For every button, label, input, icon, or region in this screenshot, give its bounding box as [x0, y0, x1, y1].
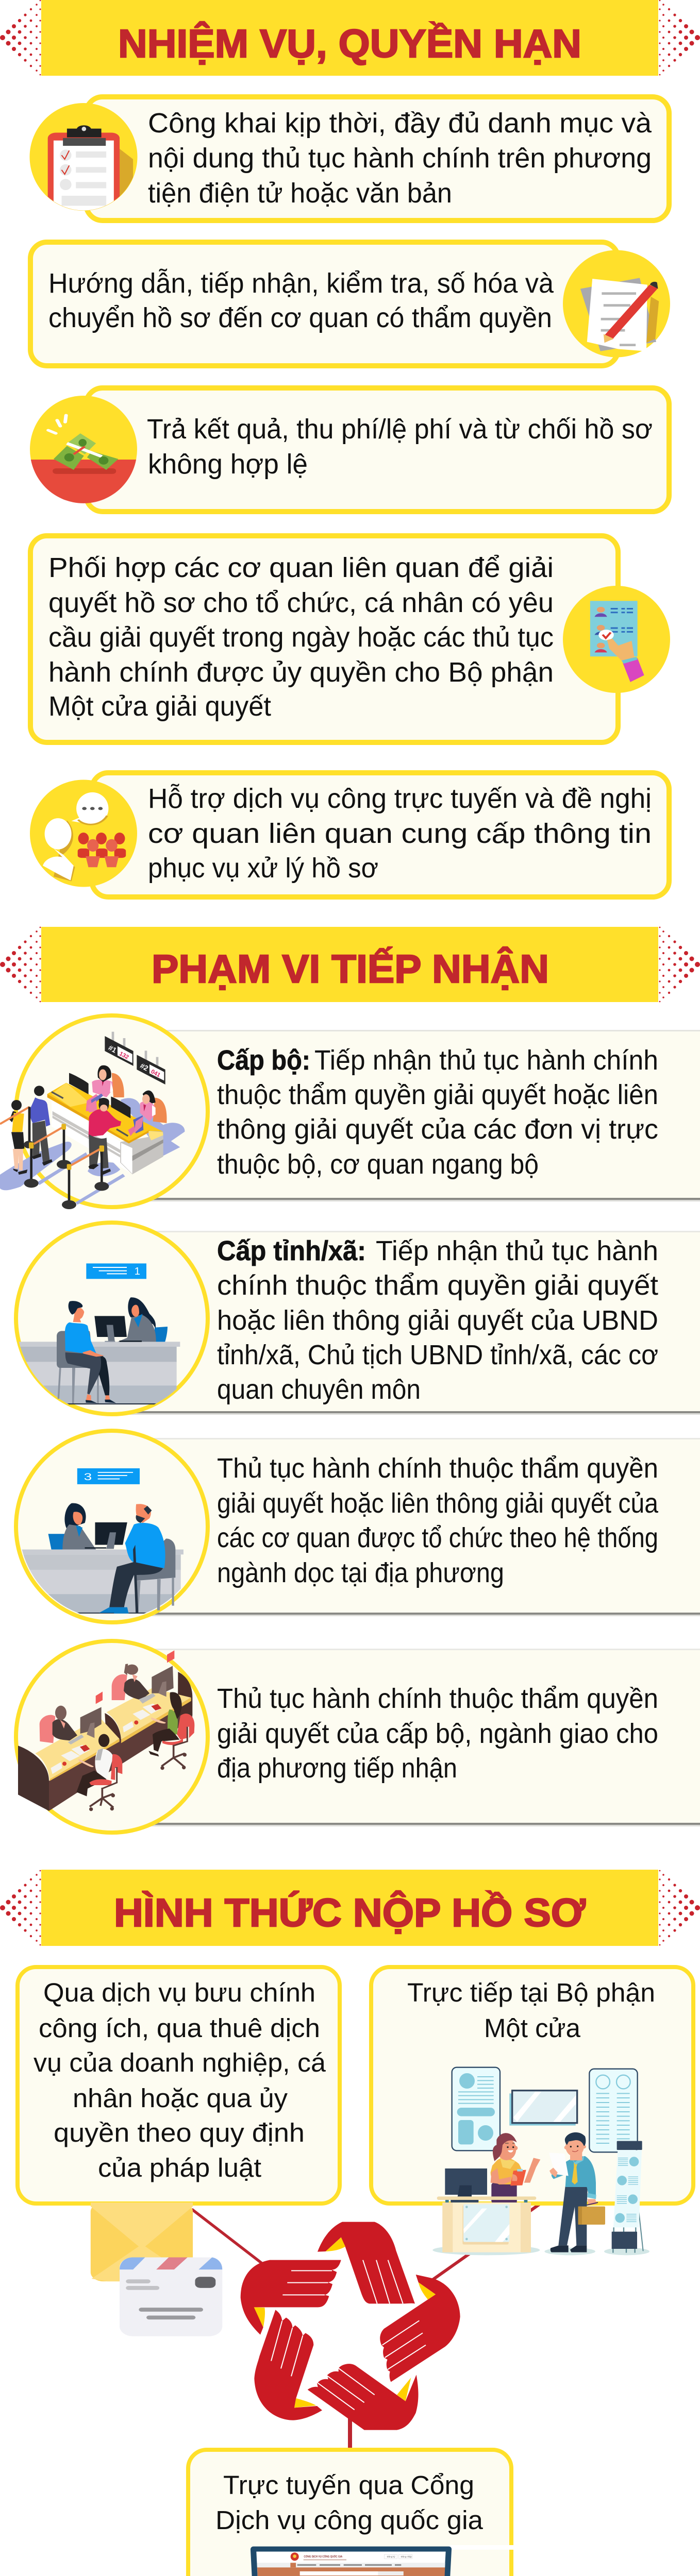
text: province and commune level: chính thuộc thẩm quyền giải quyết	[217, 1270, 658, 1301]
queue barriers	[0, 1107, 109, 1209]
text: duty 1	[148, 108, 652, 209]
customers	[76, 1692, 194, 1811]
icon: money stacks	[27, 415, 138, 506]
hand: left	[241, 2260, 341, 2335]
panel: scope - province and commune level	[15, 1223, 700, 1415]
icon: paper and pencil	[580, 278, 659, 351]
text: duty 4: cầu giải quyết trong ngày hoặc các thủ tục	[48, 622, 554, 653]
panel: duty 5 - online services	[30, 773, 669, 897]
text: ministry level: Cấp bộ:	[217, 1045, 310, 1076]
text: online submission: Dịch vụ công quốc gia	[215, 2505, 484, 2535]
text: province and commune level: Tiếp nhận thủ tục hành	[376, 1235, 658, 1266]
icon: hand choosing profile	[590, 601, 644, 682]
person: receptionist	[491, 2133, 540, 2204]
section banner: Hình thức nộp hồ sơ	[0, 1870, 700, 1946]
text: duty 4: hành chính được ủy quyền cho Bộ phận	[48, 657, 554, 688]
text: submission by post: nhân hoặc qua ủy	[73, 2083, 288, 2113]
text: duty 3: Trả kết quả, thu phí/lệ phí và từ chối hồ sơ	[147, 414, 653, 445]
text: duty 2: Hướng dẫn, tiếp nhận, kiểm tra, số hóa và	[48, 268, 554, 299]
panel: scope - ministry level	[0, 1015, 700, 1209]
text: duty 1: tiện điện tử hoặc văn bản	[148, 178, 452, 209]
panel: online submission	[188, 2450, 514, 2576]
text: vertical agencies: giải quyết hoặc liên thông giải quyết của	[217, 1488, 659, 1519]
person: man in red sweater	[89, 1098, 121, 1176]
text: duty 3	[147, 414, 653, 480]
panel: duty 1 - public disclosure	[30, 97, 669, 221]
text: duty 4: quyết hồ sơ cho tổ chức, cá nhân có yêu	[48, 587, 554, 618]
text: delegated procedures: địa phương tiếp nhận	[217, 1753, 457, 1784]
text: delegated procedures: giải quyết của cấp bộ, ngành giao cho	[217, 1718, 658, 1749]
text: vertical agencies: Thủ tục hành chính thuộc thẩm quyền	[217, 1453, 658, 1484]
hand: bottom	[308, 2364, 419, 2430]
illustration: man at service desk, counter 3	[13, 1468, 184, 1614]
monitor on counter	[445, 2168, 487, 2197]
standee	[604, 2141, 649, 2255]
text: vertical agencies: ngành dọc tại địa phương	[217, 1557, 504, 1588]
panel: duty 4 - coordination	[30, 536, 670, 742]
logo: star of five red hands	[241, 2222, 460, 2430]
signs: counter number boards: #1	[107, 1043, 118, 1055]
text: province and commune level: quan chuyên môn	[217, 1374, 421, 1405]
text: submission by post: công ích, qua thuê dịch	[39, 2013, 320, 2043]
text: submission in person: Trực tiếp tại Bộ phận	[407, 1978, 655, 2007]
text: duty 5	[148, 783, 652, 884]
hand: right	[380, 2275, 460, 2382]
illustration: ministry counter with queue	[0, 1032, 185, 1209]
icon: chat between person and group	[43, 792, 126, 882]
text: duty 5: cơ quan liên quan cung cấp thông tin	[148, 818, 652, 849]
text: submission by post	[34, 1978, 326, 2182]
text: ministry level: thông giải quyết của các đơn vị trực	[217, 1114, 658, 1145]
wall screen	[509, 2091, 577, 2126]
text: duty 2: chuyển hồ sơ đến cơ quan có thẩm quyền	[48, 302, 552, 333]
text: submission in person: Một cửa	[484, 2013, 581, 2043]
heading: Phạm vi tiếp nhận: PHẠM VI TIẾP NHẬN	[152, 946, 549, 991]
text: duty 1: nội dung thủ tục hành chính trên phương	[148, 143, 652, 174]
signs: counter number boards: #2	[139, 1061, 150, 1073]
text: online submission: Trực tuyến qua Cổng	[223, 2470, 474, 2500]
panel: duty 2 - guidance	[30, 242, 670, 366]
text: submission by post: quyền theo quy định	[54, 2118, 305, 2147]
text: submission by post: Qua dịch vụ bưu chính	[43, 1978, 315, 2007]
panel: duty 3 - results and fees	[27, 388, 669, 512]
text: ministry level: Tiếp nhận thủ tục hành chính	[314, 1045, 658, 1076]
signs: counter number boards: 041	[150, 1069, 161, 1079]
laptop screen: Đăng nhập	[401, 2555, 412, 2558]
illustration: one-stop service counter	[432, 2067, 649, 2255]
text: delegated procedures	[217, 1683, 658, 1784]
signs: counter number boards	[105, 1032, 165, 1084]
info board right	[589, 2069, 638, 2152]
signs: counter number boards: 132	[118, 1050, 130, 1061]
text: duty 4: Một cửa giải quyết	[48, 691, 271, 722]
laptop screen: Đăng ký	[387, 2555, 395, 2558]
illustration: man at service desk, counter 3: 3	[84, 1471, 92, 1483]
icon: envelope and postcard	[91, 2202, 222, 2336]
illustration: laptop with national public service portal	[251, 2547, 452, 2576]
panel: scope - delegated procedures	[16, 1641, 700, 1833]
text: duty 5: phục vụ xử lý hồ sơ	[148, 853, 378, 884]
text: online submission	[215, 2470, 484, 2535]
panel: scope - vertical agencies	[13, 1431, 700, 1622]
person: man in blue sweater	[28, 1086, 53, 1166]
text: duty 5: Hỗ trợ dịch vụ công trực tuyến và đề nghị	[148, 783, 652, 814]
illustration: customer at service desk, counter 1: 1	[135, 1265, 140, 1277]
section banner: Phạm vi tiếp nhận	[0, 927, 700, 1002]
icon: clipboard checklist	[48, 125, 133, 214]
text: submission by post: của pháp luật	[98, 2153, 261, 2182]
hand: lower left	[254, 2310, 322, 2420]
text: duty 4	[48, 552, 554, 722]
person: citizen with briefcase	[544, 2132, 605, 2255]
section banner: Nhiệm vụ, quyền hạn	[0, 0, 700, 76]
heading: Hình thức nộp hồ sơ: HÌNH THỨC NỘP HỒ SƠ	[114, 1890, 586, 1935]
text: duty 3: không hợp lệ	[148, 449, 308, 480]
person: woman in yellow	[9, 1100, 27, 1175]
illustration: customer at service desk, counter 1	[15, 1263, 180, 1404]
text: ministry level: thuộc bộ, cơ quan ngang bộ	[217, 1149, 539, 1180]
text: duty 2	[48, 268, 554, 333]
text: vertical agencies	[217, 1453, 659, 1588]
text: province and commune level: tỉnh/xã, Chủ tịch UBND tỉnh/xã, các cơ	[217, 1340, 658, 1370]
text: province and commune level: Cấp tỉnh/xã:	[217, 1235, 366, 1266]
text: duty 1: Công khai kịp thời, đầy đủ danh mục và	[148, 108, 652, 139]
panel: submission by post	[18, 1967, 340, 2204]
panel: submission in person	[371, 1967, 693, 2204]
text: province and commune level: hoặc liên thông giải quyết của UBND	[217, 1305, 658, 1336]
papers on desks	[51, 1704, 161, 1774]
info board left	[452, 2067, 500, 2150]
text: duty 4: Phối hợp các cơ quan liên quan để giải	[48, 552, 554, 583]
laptop screen	[251, 2547, 452, 2576]
text: ministry level	[217, 1045, 658, 1180]
text: submission in person	[407, 1978, 655, 2043]
laptop screen: CỔNG DỊCH VỤ CÔNG QUỐC GIA	[304, 2554, 342, 2558]
reception counter	[432, 2196, 540, 2255]
text: ministry level: thuộc thẩm quyền giải quyết hoặc liên	[217, 1079, 658, 1110]
illustration: isometric office counters	[18, 1650, 194, 1811]
text: delegated procedures: Thủ tục hành chính thuộc thẩm quyền	[217, 1683, 658, 1714]
text: submission by post: vụ của doanh nghiệp, cá	[34, 2048, 326, 2077]
arrow: connector lines to star logo	[192, 2203, 541, 2450]
hand: top	[318, 2222, 415, 2303]
staff seats and agents	[40, 1664, 174, 1744]
heading: Nhiệm vụ, quyền hạn: NHIỆM VỤ, QUYỀN HẠN	[118, 21, 581, 66]
text: province and commune level	[217, 1235, 658, 1405]
